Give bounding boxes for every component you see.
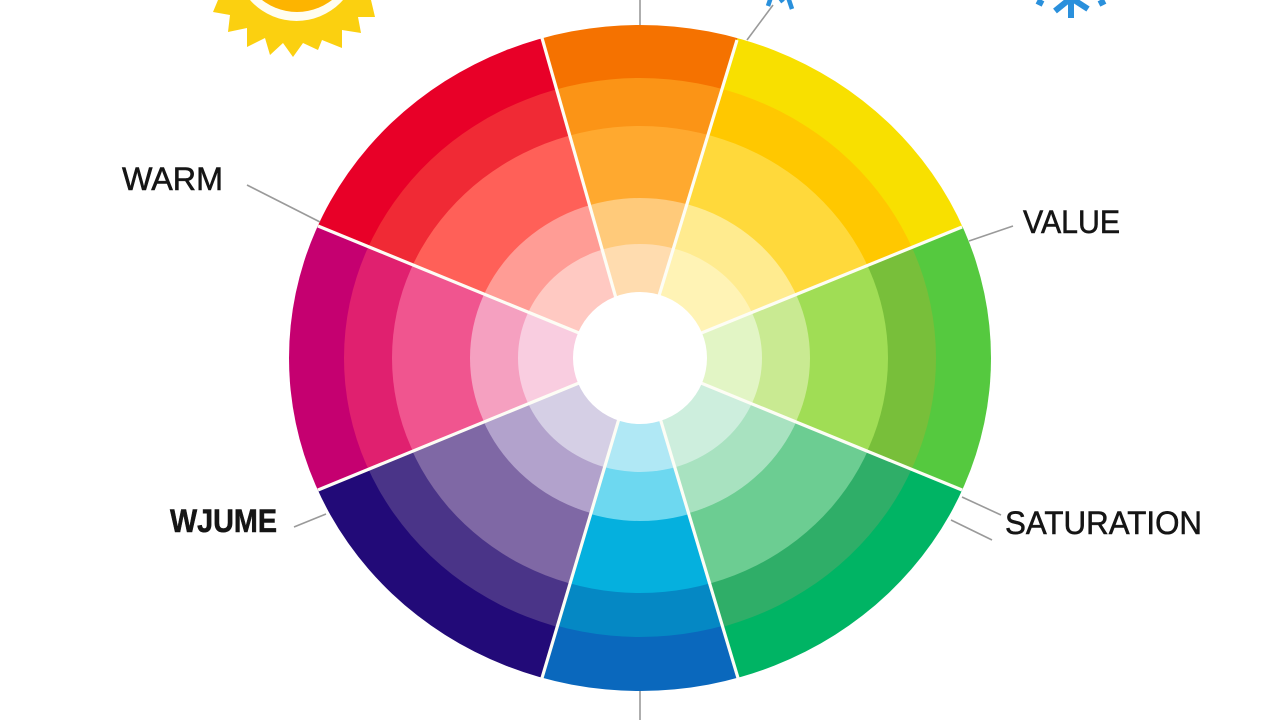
segment: purple	[318, 384, 617, 678]
segment: red	[318, 38, 614, 332]
segment: yellow	[660, 38, 963, 332]
leader lines	[247, 0, 1013, 720]
icon: snowflake partly cropped, centre	[768, 0, 792, 9]
label: value: VALUE	[1023, 204, 1120, 240]
segment: green	[702, 227, 991, 490]
color wheel	[289, 25, 991, 691]
segment: teal green	[662, 384, 962, 678]
centre hole	[573, 292, 707, 424]
segment: magenta	[289, 226, 578, 490]
label: saturation: SATURATION	[1005, 505, 1202, 541]
segment: orange	[544, 25, 738, 296]
segment: blue	[544, 421, 736, 691]
icon: snowflake partly cropped, right	[1037, 0, 1105, 18]
label: warm: WARM	[122, 161, 223, 197]
icon: sun	[213, 0, 375, 57]
label: garbled volume: WJUME	[170, 503, 277, 539]
